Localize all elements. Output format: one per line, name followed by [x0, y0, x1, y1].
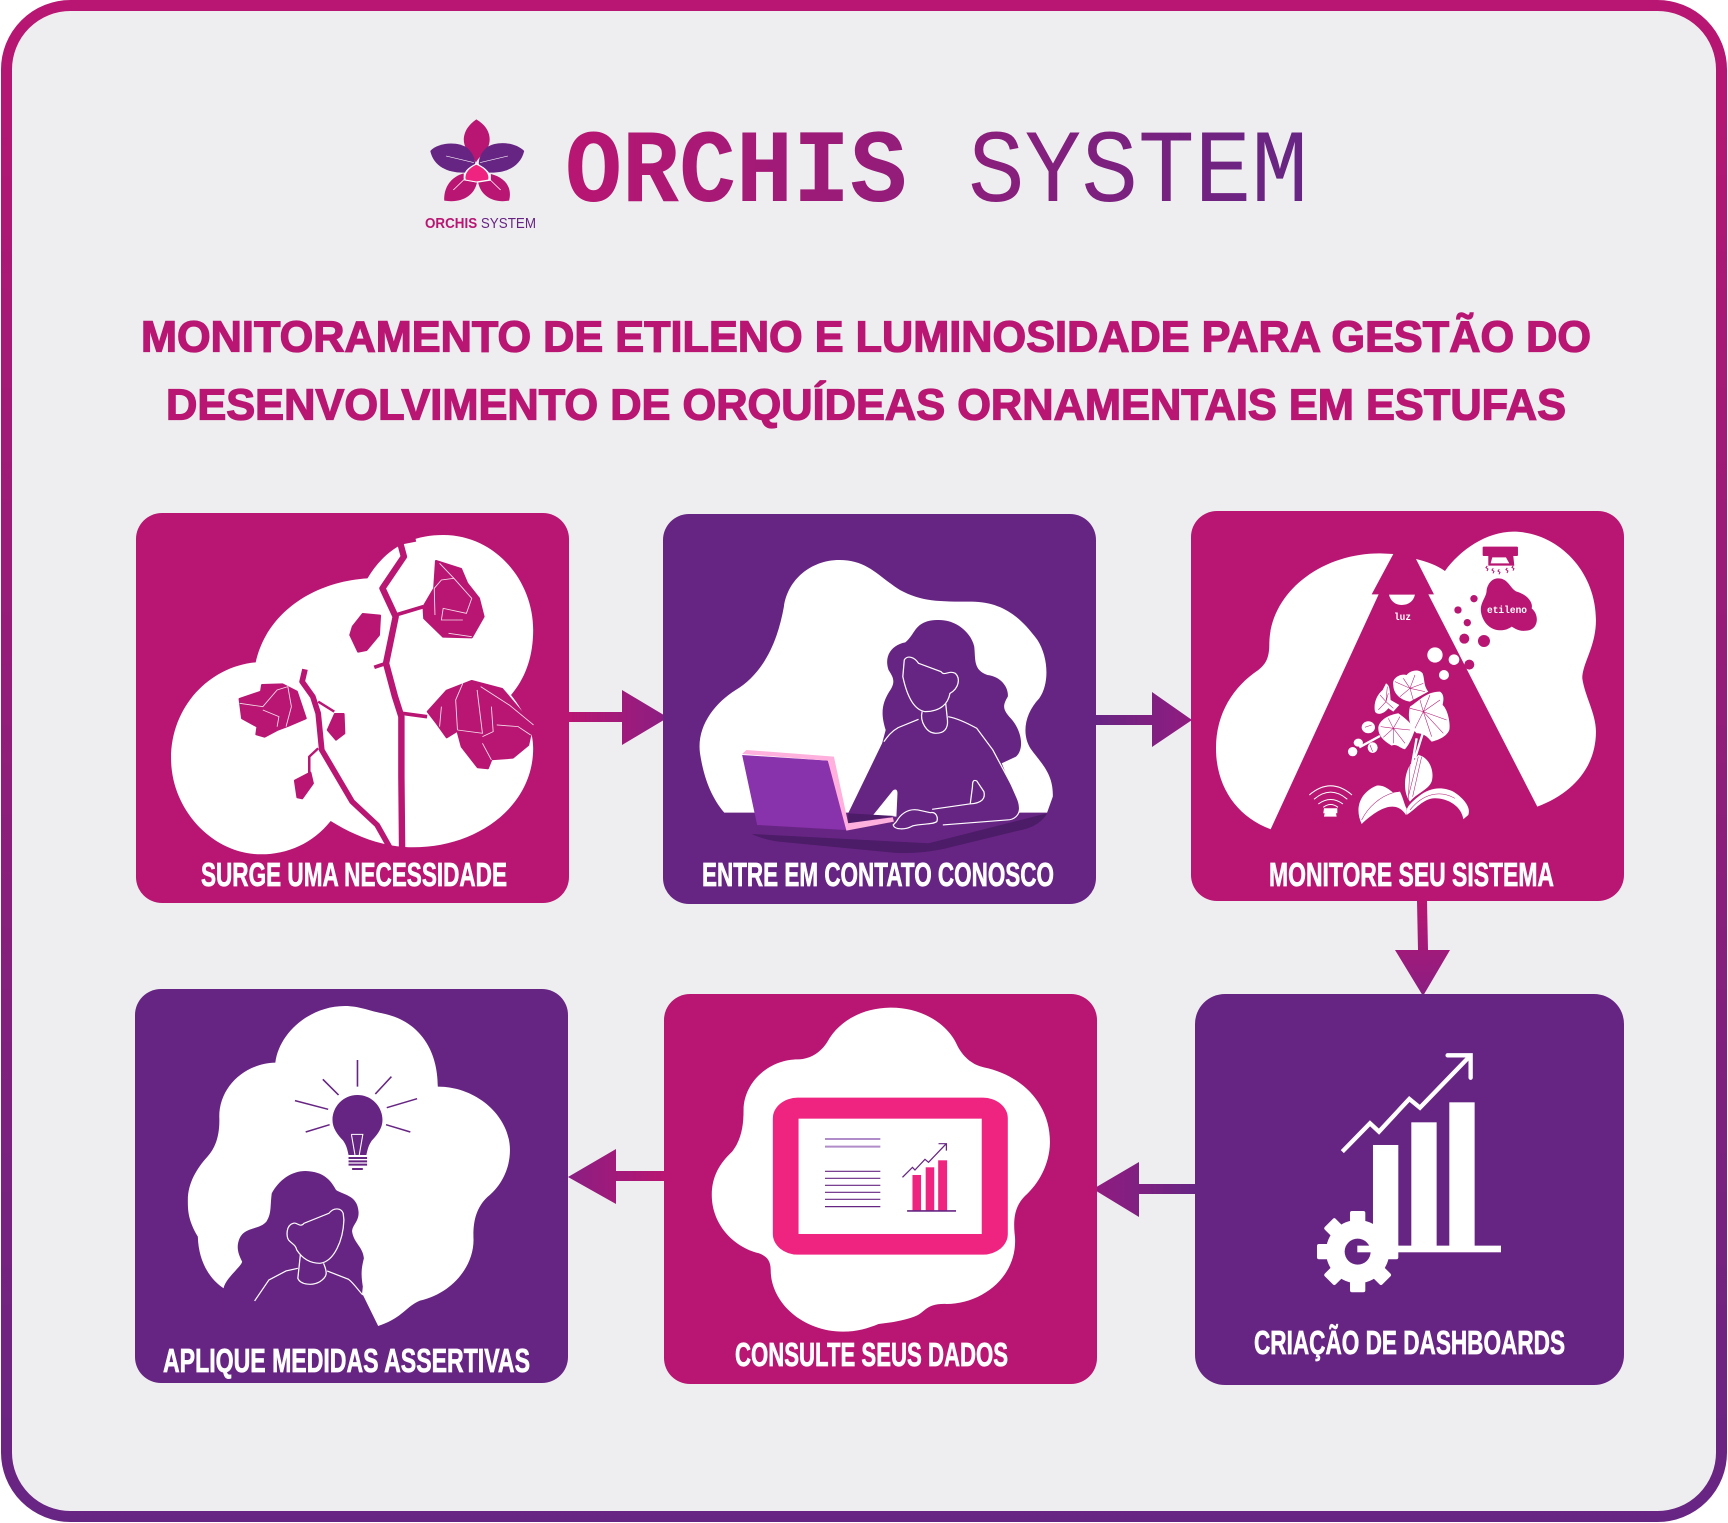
title: SYSTEM: SYSTEM	[968, 115, 1308, 233]
illustration: woman with idea	[188, 1006, 510, 1328]
logo: orchid flower	[430, 119, 524, 201]
illustration: tablet with data	[712, 1008, 1050, 1332]
illustration: greenhouse monitoring	[1216, 532, 1596, 829]
heading: MONITORAMENTO DE ETILENO E LUMINOSIDADE PARA GESTÃO DO	[141, 312, 1591, 362]
heading: DESENVOLVIMENTO DE ORQUÍDEAS ORNAMENTAIS EM ESTUFAS	[166, 380, 1566, 430]
label: etileno: etileno	[1487, 605, 1527, 617]
panel: surge uma necessidade	[136, 513, 569, 903]
arrow: step 1 to 2	[569, 690, 668, 745]
panel: monitore seu sistema	[1191, 511, 1624, 901]
caption: SURGE UMA NECESSIDADE	[201, 856, 507, 893]
arrow: step 4 to 5	[1093, 1162, 1195, 1217]
heading	[141, 312, 1591, 430]
panel: consulte seus dados	[664, 994, 1097, 1384]
arrow: step 3 to 4	[1395, 901, 1450, 996]
arrow: step 2 to 3	[1096, 692, 1192, 747]
label: luz: luz	[1394, 612, 1411, 624]
light bulb	[295, 1060, 417, 1169]
panel: aplique medidas assertivas	[135, 989, 568, 1383]
caption: CRIAÇÃO DE DASHBOARDS	[1254, 1324, 1565, 1361]
illustration: woman on laptop	[700, 560, 1053, 853]
panel: criacao de dashboards	[1195, 994, 1624, 1385]
ethylene sensor	[1454, 547, 1537, 670]
arrow: step 5 to 6	[568, 1149, 664, 1204]
caption: APLIQUE MEDIDAS ASSERTIVAS	[163, 1342, 530, 1379]
wifi sensor	[1309, 786, 1352, 807]
illustration: wilted orchid	[171, 535, 534, 854]
illustration: dashboard chart with gear	[1317, 1055, 1501, 1292]
lamp	[1389, 595, 1415, 605]
panel: entre em contato conosco	[663, 514, 1096, 904]
orchid plant	[1348, 670, 1469, 824]
caption: MONITORE SEU SISTEMA	[1269, 856, 1554, 893]
caption: CONSULTE SEUS DADOS	[735, 1336, 1008, 1373]
caption: ENTRE EM CONTATO CONOSCO	[702, 856, 1054, 893]
title: ORCHIS: ORCHIS	[565, 115, 907, 233]
logo caption: ORCHIS SYSTEM	[425, 216, 536, 232]
